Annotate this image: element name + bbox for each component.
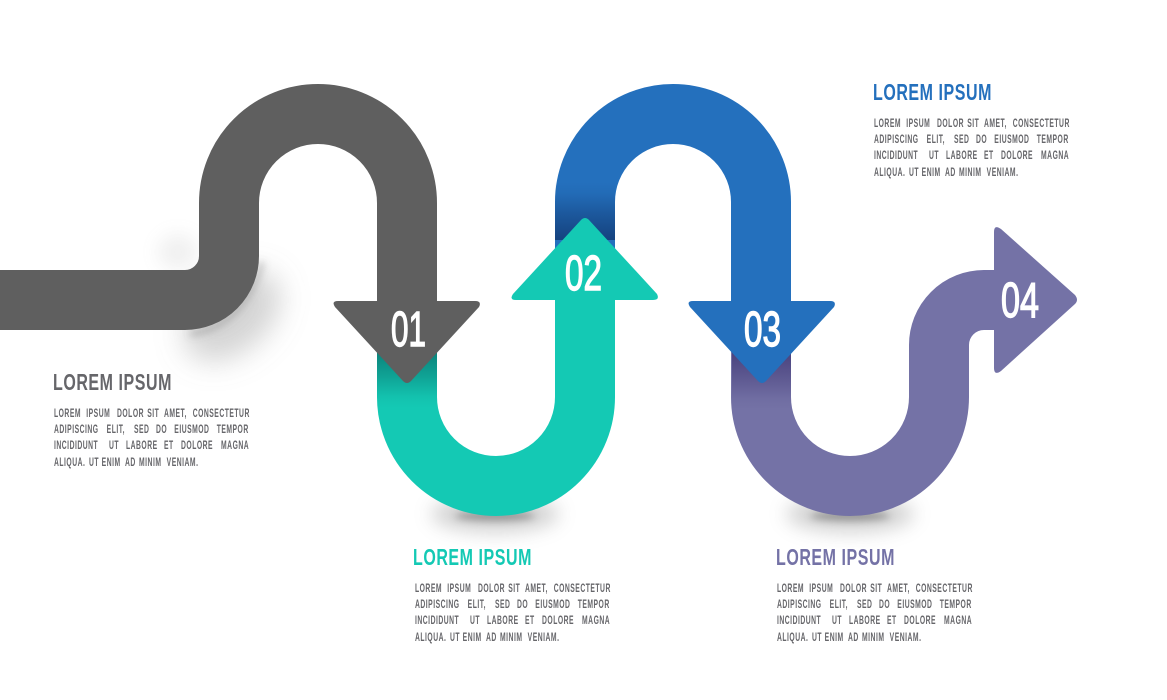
heading 1: LOREM IPSUM xyxy=(53,369,172,395)
body 3: SIT xyxy=(870,582,882,596)
body 4: SED xyxy=(954,133,969,147)
body 1: DO xyxy=(156,423,167,437)
purple band shading xyxy=(732,352,791,410)
body 4: EIUSMOD xyxy=(994,133,1029,147)
body 3: AD xyxy=(848,631,859,645)
body 1: CONSECTETUR xyxy=(193,407,250,421)
shadow: purple curve wide xyxy=(786,495,914,533)
body 2: LABORE xyxy=(487,614,519,628)
arrow head 02 xyxy=(512,218,658,300)
text block: step 1 xyxy=(53,369,250,470)
purple road xyxy=(761,300,1010,486)
teal road xyxy=(407,290,585,486)
body 1: ELIT, xyxy=(107,423,125,437)
blue road xyxy=(585,114,761,310)
body 3: TEMPOR xyxy=(940,598,972,612)
body 2: AD xyxy=(486,631,497,645)
text block: step 2 xyxy=(413,544,611,645)
body 2: LOREM xyxy=(415,582,442,596)
body 4: DOLOR xyxy=(937,117,964,131)
body 4: UT xyxy=(929,149,939,163)
body 1: EIUSMOD xyxy=(174,423,209,437)
body 3: EIUSMOD xyxy=(897,598,932,612)
body 3: DOLORE xyxy=(904,614,936,628)
body 1 xyxy=(54,407,250,470)
arrow head 03 xyxy=(689,301,835,383)
body 2: ENIM xyxy=(463,631,482,645)
body 4: UT xyxy=(909,166,919,180)
body 3: VENIAM. xyxy=(890,631,921,645)
body 4: LABORE xyxy=(946,149,978,163)
body 1: MAGNA xyxy=(221,439,249,453)
shadow: grey inner corner xyxy=(158,234,198,270)
number 04: 04 xyxy=(1001,274,1039,328)
shadow: grey road bend xyxy=(166,252,298,380)
arrow head 01 xyxy=(334,301,480,383)
body 4: IPSUM xyxy=(906,117,930,131)
body 4: CONSECTETUR xyxy=(1013,117,1070,131)
body 2: UT xyxy=(450,631,460,645)
body 4: ALIQUA. xyxy=(874,166,905,180)
body 3: ENIM xyxy=(825,631,844,645)
body 2: IPSUM xyxy=(447,582,471,596)
body 1: AMET, xyxy=(164,407,187,421)
arrow head 04 xyxy=(994,227,1077,373)
body 3: ALIQUA. xyxy=(777,631,808,645)
body 2: INCIDIDUNT xyxy=(415,614,459,628)
body 4: ENIM xyxy=(922,166,941,180)
blue band shading xyxy=(555,182,615,240)
body 2: VENIAM. xyxy=(528,631,559,645)
body 1: ENIM xyxy=(102,456,121,470)
body 4: ELIT, xyxy=(927,133,945,147)
body 1: DOLORE xyxy=(181,439,213,453)
body 4: VENIAM. xyxy=(987,166,1018,180)
body 1: LABORE xyxy=(126,439,158,453)
body 3: CONSECTETUR xyxy=(916,582,973,596)
heading 2: LOREM IPSUM xyxy=(413,544,532,570)
body 3: MAGNA xyxy=(944,614,972,628)
body 1: UT xyxy=(109,439,119,453)
body 1: VENIAM. xyxy=(167,456,198,470)
number 01: 01 xyxy=(391,303,426,357)
body 3: ET xyxy=(887,614,897,628)
body 2: MINIM xyxy=(500,631,522,645)
body 2: UT xyxy=(470,614,480,628)
body 1: TEMPOR xyxy=(217,423,249,437)
shadow: grey road bend contact xyxy=(190,262,262,334)
body 1: UT xyxy=(89,456,99,470)
body 3: UT xyxy=(832,614,842,628)
body 4: AMET, xyxy=(984,117,1007,131)
heading 3: LOREM IPSUM xyxy=(776,544,895,570)
body 4: TEMPOR xyxy=(1037,133,1069,147)
body 1: ALIQUA. xyxy=(54,456,85,470)
number 02: 02 xyxy=(565,247,602,301)
shadow: purple curve contact xyxy=(810,511,890,521)
body 4: ADIPISCING xyxy=(874,133,919,147)
body 3: AMET, xyxy=(887,582,910,596)
body 3: IPSUM xyxy=(809,582,833,596)
body 4: AD xyxy=(945,166,956,180)
body 4: MINIM xyxy=(959,166,981,180)
body 2: CONSECTETUR xyxy=(554,582,611,596)
body 2 xyxy=(415,582,611,645)
body 3 xyxy=(777,582,973,645)
text block: step 3 xyxy=(776,544,973,645)
body 2: MAGNA xyxy=(582,614,610,628)
body 3: LABORE xyxy=(849,614,881,628)
heading 4: LOREM IPSUM xyxy=(873,79,992,105)
body 4: ET xyxy=(984,149,994,163)
body 2: ADIPISCING xyxy=(415,598,460,612)
body 3: ELIT, xyxy=(830,598,848,612)
body 2: AMET, xyxy=(525,582,548,596)
body 3: INCIDIDUNT xyxy=(777,614,821,628)
body 2: ELIT, xyxy=(468,598,486,612)
shadow: teal curve wide xyxy=(431,495,559,533)
text block: step 4 xyxy=(873,79,1070,180)
body 2: SED xyxy=(495,598,510,612)
body 3: LOREM xyxy=(777,582,804,596)
body 3: ADIPISCING xyxy=(777,598,822,612)
body 2: TEMPOR xyxy=(578,598,610,612)
body 3: MINIM xyxy=(862,631,884,645)
body 4: INCIDIDUNT xyxy=(874,149,918,163)
body 2: EIUSMOD xyxy=(535,598,570,612)
body 2: ET xyxy=(525,614,535,628)
body 1: LOREM xyxy=(54,407,81,421)
body 1: IPSUM xyxy=(86,407,110,421)
body 1: MINIM xyxy=(139,456,161,470)
body 1: SIT xyxy=(147,407,159,421)
shadow: teal curve contact xyxy=(455,511,535,521)
body 1: ADIPISCING xyxy=(54,423,99,437)
body 4: SIT xyxy=(967,117,979,131)
body 3: DO xyxy=(879,598,890,612)
step 04 road and arrow xyxy=(761,227,1077,486)
body 2: DOLOR xyxy=(478,582,505,596)
body 4 xyxy=(874,117,1070,180)
body 2: ALIQUA. xyxy=(415,631,446,645)
body 2: SIT xyxy=(508,582,520,596)
body 4: LOREM xyxy=(874,117,901,131)
body 1: INCIDIDUNT xyxy=(54,439,98,453)
body 1: DOLOR xyxy=(117,407,144,421)
body 3: SED xyxy=(857,598,872,612)
number 03: 03 xyxy=(744,303,781,357)
body 4: DO xyxy=(976,133,987,147)
teal band shading xyxy=(377,352,437,408)
body 2: DOLORE xyxy=(542,614,574,628)
body 4: DOLORE xyxy=(1001,149,1033,163)
body 1: SED xyxy=(134,423,149,437)
body 1: ET xyxy=(164,439,174,453)
body 1: AD xyxy=(125,456,136,470)
grey road xyxy=(0,114,407,310)
body 4: MAGNA xyxy=(1041,149,1069,163)
body 3: DOLOR xyxy=(840,582,867,596)
body 2: DO xyxy=(517,598,528,612)
body 3: UT xyxy=(812,631,822,645)
